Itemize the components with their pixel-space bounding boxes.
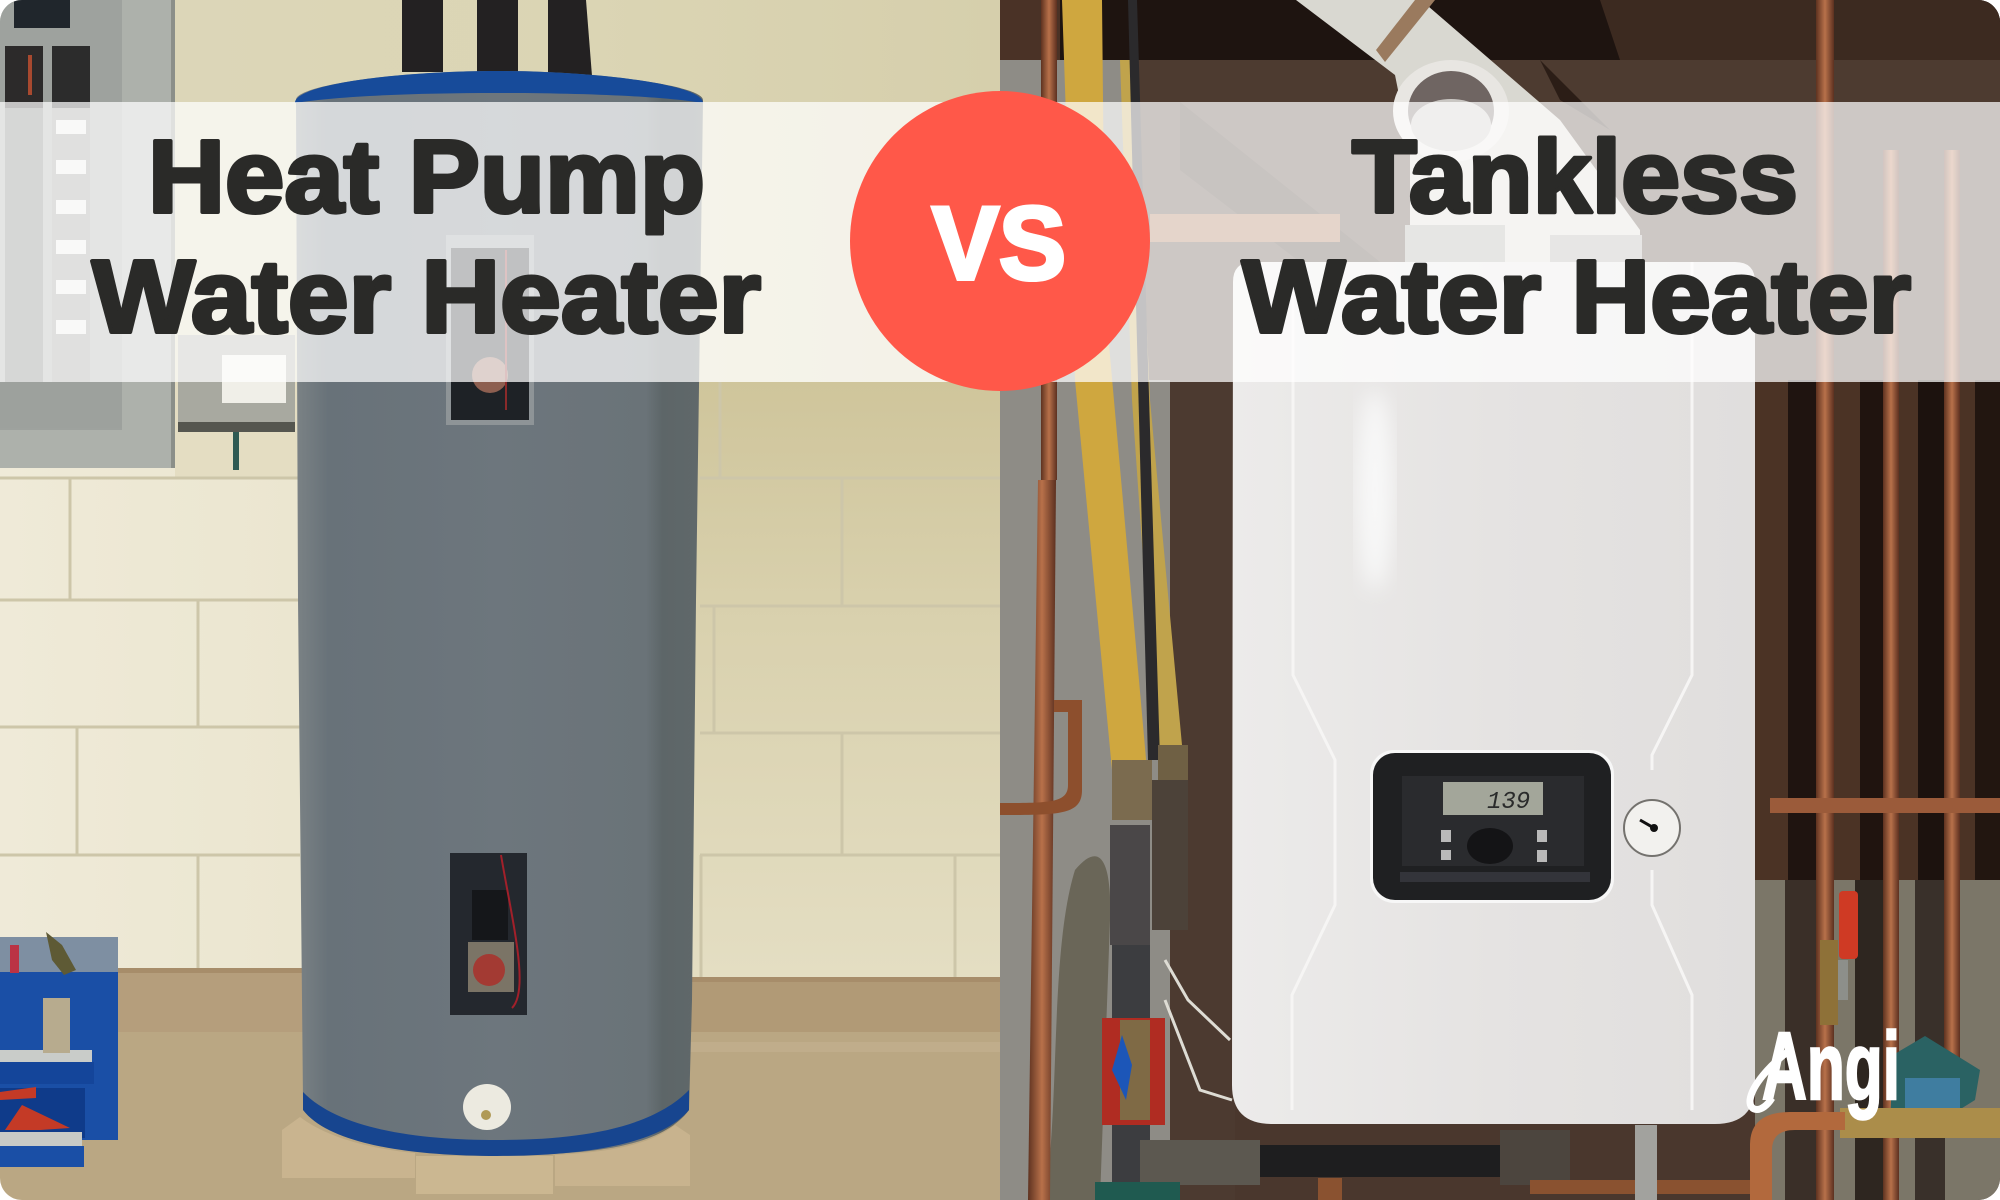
sub panel box <box>178 335 295 470</box>
concrete wall <box>1000 60 1175 1200</box>
tankless heater unit <box>1232 262 1755 1124</box>
heading: tankless water heater <box>1240 136 1912 335</box>
yellow gas hoses <box>1062 0 1182 770</box>
heading: tankless water heater: Water Heater <box>1242 239 1911 354</box>
heading: tankless water heater: Tankless <box>1352 119 1798 234</box>
brass and copper fittings <box>1750 1108 2000 1200</box>
water heater tank <box>295 71 703 1156</box>
baseboard <box>118 968 1000 1032</box>
dark wood planks <box>1170 380 2000 1200</box>
red ball valve <box>1820 891 1858 1025</box>
panel: tankless water heater photo <box>1000 0 2000 1200</box>
vent pipe <box>1296 0 1642 262</box>
dark ceiling and beams <box>1000 0 2000 380</box>
translucent title band <box>0 102 2000 382</box>
teal pump <box>1890 1036 1980 1108</box>
horizontal copper pipe <box>1150 214 1340 242</box>
upper access panel <box>446 235 534 425</box>
floor <box>0 1032 1000 1200</box>
vs badge <box>850 91 1150 391</box>
copper pipes <box>1000 0 2000 1200</box>
panel: heat pump water heater photo <box>0 0 1000 1200</box>
logo: Angi: Angi <box>1762 1013 1900 1120</box>
heading: heat pump water heater: Heat Pump <box>148 119 705 234</box>
control panel: 139 <box>1487 789 1530 816</box>
lower access panel <box>450 853 527 1015</box>
wood blocks <box>282 1117 690 1194</box>
wall block mortar lines <box>0 382 1000 978</box>
heading: heat pump water heater: Water Heater <box>92 239 761 354</box>
black insulated pipes <box>402 0 592 76</box>
iron gas pipes and valves <box>1095 745 1760 1200</box>
electrical panel <box>0 0 175 468</box>
vs badge: VS <box>932 186 1066 302</box>
heading: heat pump water heater <box>90 139 762 335</box>
temperature gauge <box>1624 800 1680 856</box>
drain valve <box>463 1084 511 1130</box>
logo: Angi <box>1746 1028 1896 1121</box>
blue toolbox <box>0 932 118 1167</box>
control panel <box>1370 750 1614 903</box>
